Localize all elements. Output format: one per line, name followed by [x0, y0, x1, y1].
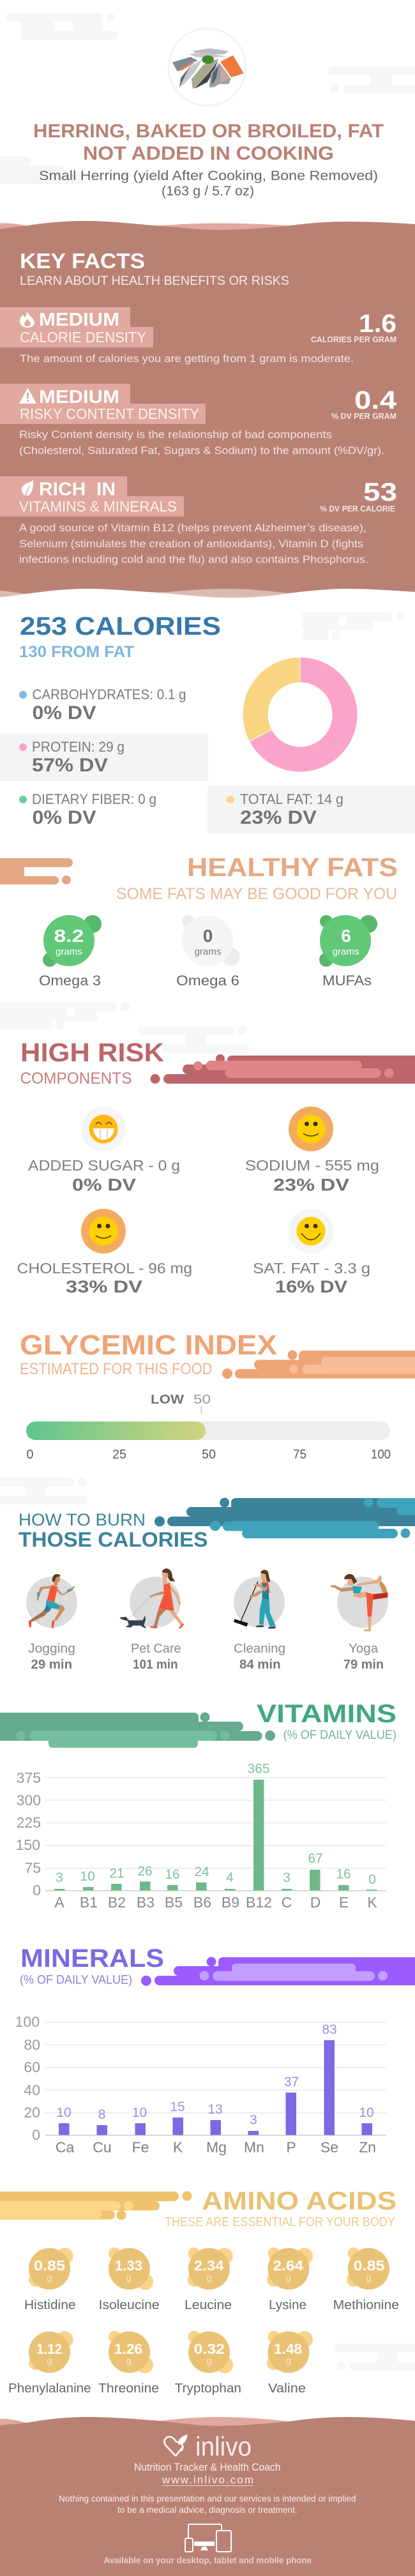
row: total fat	[207, 786, 415, 833]
header section	[0, 13, 415, 199]
activity: jogging: Jogging	[28, 1642, 75, 1656]
bar chart: vitamins: 24	[194, 1865, 209, 1879]
panel: minerals	[15, 1944, 415, 2156]
bar chart: vitamins: 75	[24, 1860, 41, 1876]
fat: omega 6: Omega 6	[176, 973, 239, 989]
row: dietary fiber: DIETARY FIBER: 0 g	[32, 791, 156, 807]
disclaimer	[59, 2494, 356, 2515]
heading: 253 calories: 253 CALORIES	[20, 612, 221, 640]
gauge marker: LOW	[151, 1393, 184, 1407]
decoration: orange bars	[222, 1350, 415, 1379]
fact: calorie density: CALORIES PER GRAM	[311, 335, 396, 344]
fact: risky content density: Risky Content density is the relationship of bad components	[19, 428, 332, 441]
amino: tryptophan: Tryptophan	[175, 2382, 241, 2396]
subheading: healthy fats: SOME FATS MAY BE GOOD FOR YOU	[116, 885, 397, 903]
fact: vitamins and minerals	[0, 476, 397, 566]
bar chart: minerals: 10	[56, 2105, 72, 2120]
amino: histidine: Histidine	[24, 2298, 76, 2312]
gauge axis: 25	[112, 1448, 126, 1462]
amino: histidine	[24, 2248, 76, 2312]
bar chart: vitamins: A	[54, 1894, 64, 1911]
title: HERRING, BAKED OR BROILED, FAT	[33, 121, 384, 142]
fact: vitamins and minerals: RICH IN	[39, 479, 116, 499]
icon: happy face	[296, 1217, 326, 1245]
risk: added sugar	[28, 1107, 180, 1194]
amino: phenylalanine: 1.12	[36, 2341, 62, 2357]
disclaimer: Nothing contained in this presentation and our services is intended or implied	[59, 2494, 356, 2504]
fat: omega 3	[39, 915, 102, 989]
row: total fat: TOTAL FAT: 14 g	[240, 791, 343, 807]
risk: added sugar: 0% DV	[72, 1175, 136, 1194]
bar chart: vitamins: 16	[165, 1867, 180, 1882]
amino: threonine: g	[126, 2356, 132, 2367]
amino: methionine	[333, 2248, 399, 2312]
bar chart: vitamins: B6	[193, 1894, 211, 1911]
bar chart: minerals: 15	[170, 2100, 185, 2114]
amino: tryptophan: 0.32	[194, 2341, 225, 2357]
risk: cholesterol: 33% DV	[66, 1277, 142, 1296]
panel: key facts	[0, 221, 415, 598]
bar chart: vitamins: K	[367, 1894, 377, 1911]
activity: yoga: 79 min	[343, 1658, 384, 1672]
gauge axis: 100	[371, 1448, 391, 1462]
amino: valine: g	[285, 2356, 291, 2367]
fact: risky content density: MEDIUM	[39, 387, 119, 407]
bar chart: minerals	[15, 2013, 386, 2156]
subheading: from fat: 130 FROM FAT	[19, 643, 134, 661]
logo: inlivo: inlivo	[195, 2432, 252, 2462]
bar chart: minerals: P	[286, 2139, 296, 2156]
bar chart: vitamins: B3	[137, 1894, 155, 1911]
fact: calorie density	[0, 307, 396, 365]
bar chart: minerals: 10	[359, 2105, 374, 2120]
gauge axis: 0	[27, 1448, 33, 1462]
fact: risky content density	[0, 384, 397, 457]
heading: key facts: KEY FACTS	[20, 249, 145, 273]
bar chart: minerals: 8	[98, 2107, 105, 2122]
bar chart: vitamins: 3	[283, 1870, 290, 1885]
icon: devices	[185, 2524, 231, 2552]
disclaimer: to be a medical advice, diagnosis or treatment.	[117, 2504, 298, 2515]
activity: yoga: Yoga	[349, 1642, 379, 1656]
amino: histidine: g	[47, 2273, 52, 2284]
fact: vitamins and minerals: infections including cold and the flu) and also contains Phosphorus.	[19, 553, 368, 566]
bar chart: minerals: Mg	[206, 2139, 227, 2156]
bar chart: minerals: Cu	[93, 2139, 112, 2156]
fat: omega 3: grams	[56, 946, 82, 957]
bar chart: minerals: 100	[15, 2013, 40, 2030]
activity: pet care: Pet Care	[131, 1642, 181, 1656]
heading: high risk: HIGH RISK	[20, 1038, 164, 1067]
heading: glycemic index: GLYCEMIC INDEX	[20, 1330, 277, 1361]
title: NOT ADDED IN COOKING	[83, 143, 334, 164]
fact: calorie density: MEDIUM	[39, 310, 119, 330]
bar chart: minerals: Zn	[359, 2139, 376, 2156]
bar chart: vitamins: C	[282, 1894, 292, 1911]
risk: sodium	[245, 1107, 379, 1194]
icon: smiling face	[89, 1217, 117, 1245]
amino: methionine: Methionine	[333, 2298, 399, 2312]
activity: cleaning: 84 min	[239, 1658, 281, 1672]
heading: those calories: THOSE CALORIES	[19, 1528, 208, 1551]
row: protein	[0, 734, 208, 781]
bar chart: vitamins: 375	[17, 1769, 41, 1786]
food image circle	[169, 28, 246, 106]
panel: footer	[0, 2417, 415, 2576]
bar chart: vitamins: 10	[80, 1869, 95, 1884]
bar chart: vitamins: E	[339, 1894, 349, 1911]
bar chart: vitamins: D	[310, 1894, 321, 1911]
amino: isoleucine: g	[126, 2273, 132, 2284]
amino: isoleucine: Isoleucine	[99, 2298, 160, 2312]
fact: vitamins and minerals: 53	[363, 478, 397, 506]
amino: leucine: g	[206, 2273, 212, 2284]
bar chart: vitamins: 16	[336, 1867, 351, 1882]
row: dietary fiber	[19, 791, 156, 828]
fat: omega 6	[176, 915, 240, 989]
risk: saturated fat	[253, 1209, 370, 1296]
icon: warning triangle	[19, 388, 36, 404]
icon: woman in yoga pose	[331, 1574, 388, 1632]
bar chart: vitamins: 150	[16, 1837, 40, 1853]
fat: mufas	[319, 915, 377, 989]
panel: calories	[0, 612, 415, 833]
icon: grinning face	[89, 1115, 117, 1143]
bar chart: minerals: 40	[24, 2082, 40, 2098]
panel: high risk	[0, 1002, 415, 1296]
fact: risky content density: (Cholesterol, Saturated Fat, Sugars & Sodium) to the amount (%DV/gr).	[19, 444, 384, 457]
amino: methionine: g	[366, 2273, 372, 2284]
amino: valine: 1.48	[274, 2341, 302, 2357]
row: carbohydrates: CARBOHYDRATES: 0.1 g	[32, 686, 186, 702]
bar chart: minerals: 83	[322, 2022, 337, 2037]
bar chart: minerals: Mn	[244, 2139, 264, 2156]
subheading: essential: THESE ARE ESSENTIAL FOR YOUR BODY	[165, 2215, 395, 2229]
bar chart: vitamins: 225	[17, 1814, 41, 1831]
panel: vitamins	[0, 1700, 396, 1911]
fat: mufas: MUFAs	[322, 973, 372, 989]
decoration: yellow bars	[0, 2192, 192, 2220]
amino: phenylalanine: g	[47, 2356, 52, 2367]
icon: leaf	[22, 480, 33, 496]
bar chart: vitamins: B12	[246, 1894, 272, 1911]
risk: saturated fat: 16% DV	[275, 1277, 347, 1296]
activity: yoga	[331, 1574, 388, 1672]
bar chart: minerals: Se	[321, 2139, 338, 2156]
risk: sodium: 23% DV	[273, 1175, 349, 1194]
subheading: daily value: (% OF DAILY VALUE)	[283, 1729, 396, 1742]
fact: vitamins and minerals: VITAMINS & MINERALS	[19, 498, 177, 515]
amino: leucine: Leucine	[185, 2298, 232, 2312]
activity: pet care	[120, 1568, 184, 1672]
fact: risky content density: 0.4	[354, 386, 397, 414]
panel: amino acids	[0, 2187, 415, 2396]
decoration: brown bars	[0, 858, 73, 884]
amino: phenylalanine: Phenylalanine	[8, 2382, 91, 2396]
donut chart	[243, 657, 358, 772]
title	[33, 121, 384, 164]
fat: omega 6: grams	[194, 946, 221, 957]
heading: vitamins: VITAMINS	[257, 1700, 396, 1728]
bar chart: vitamins: 0	[368, 1872, 376, 1887]
gauge marker	[151, 1393, 211, 1414]
row: dietary fiber: 0% DV	[32, 807, 96, 828]
amino: isoleucine: 1.33	[115, 2258, 142, 2274]
subheading: daily value: (% OF DAILY VALUE)	[20, 1974, 132, 1987]
bar chart: minerals: 10	[132, 2105, 147, 2120]
bar chart: vitamins: B5	[165, 1894, 183, 1911]
fact: risky content density: RISKY CONTENT DENSITY	[20, 405, 199, 422]
risk: sodium: SODIUM - 555 mg	[245, 1157, 379, 1174]
amino: phenylalanine	[8, 2331, 91, 2396]
fat: omega 6: 0	[203, 926, 213, 946]
heading: amino acids: AMINO ACIDS	[202, 2187, 396, 2215]
icon: jogger	[29, 1574, 75, 1628]
bar chart: minerals: 80	[24, 2036, 40, 2053]
bar chart: minerals: 0	[32, 2126, 40, 2143]
serving subtitle	[39, 169, 378, 199]
fact: calorie density: CALORIE DENSITY	[20, 329, 146, 345]
risk: added sugar: ADDED SUGAR - 0 g	[28, 1157, 180, 1174]
gauge axis: 75	[293, 1448, 306, 1462]
gauge bar	[26, 1421, 390, 1440]
bar chart: minerals: Fe	[132, 2139, 149, 2156]
fact: vitamins and minerals: A good source of Vitamin B12 (helps prevent Alzheimer’s disease),	[19, 522, 366, 534]
amino: tryptophan	[175, 2331, 241, 2396]
activity: jogging: 29 min	[31, 1658, 72, 1672]
bar chart: vitamins: B1	[80, 1894, 98, 1911]
fact: vitamins and minerals: % DV PER CALORIE	[320, 504, 395, 513]
gauge marker: 50	[193, 1393, 211, 1407]
fact: vitamins and minerals: Selenium (stimulates the creation of antioxidants), Vitamin D (fights	[19, 538, 363, 550]
bar chart: vitamins: 4	[226, 1870, 234, 1885]
availability note: Available on your desktop, tablet and mobile phone	[103, 2555, 312, 2565]
heading: minerals: MINERALS	[20, 1944, 164, 1973]
amino: valine: Valine	[268, 2382, 306, 2396]
amino: isoleucine	[99, 2248, 160, 2312]
amino: threonine: Threonine	[98, 2382, 159, 2396]
amino: lysine: g	[285, 2273, 291, 2284]
fact: calorie density: 1.6	[359, 310, 396, 338]
bar chart: vitamins: 0	[33, 1882, 41, 1898]
decoration: purple bars	[141, 1957, 415, 1986]
amino: lysine	[267, 2248, 313, 2312]
subheading: key facts: LEARN ABOUT HEALTH BENEFITS OR RISKS	[20, 273, 289, 288]
bar chart: minerals: 3	[250, 2113, 257, 2128]
gauge axis: 50	[202, 1448, 216, 1462]
amino: leucine: 2.34	[194, 2258, 224, 2274]
website link: www.inlivo.com	[162, 2474, 253, 2486]
amino: lysine: 2.64	[273, 2258, 304, 2274]
row: total fat: 23% DV	[240, 807, 317, 828]
row: carbohydrates	[19, 686, 186, 724]
fat: omega 3: 8.2	[54, 926, 84, 946]
heading: how to burn: HOW TO BURN	[19, 1510, 146, 1529]
fat: mufas: 6	[341, 926, 351, 946]
amino: threonine	[98, 2331, 159, 2396]
bar chart: vitamins: 67	[308, 1851, 323, 1866]
bar chart: minerals: K	[173, 2139, 183, 2156]
activity: jogging	[26, 1574, 77, 1672]
fact: calorie density: The amount of calories you are getting from 1 gram is moderate.	[20, 352, 354, 365]
bar chart: vitamins: 300	[17, 1792, 41, 1808]
bar chart: vitamins: 26	[137, 1864, 153, 1879]
icon: woman walking dog	[120, 1568, 184, 1629]
bar chart: minerals: 60	[24, 2059, 40, 2075]
bar chart: vitamins: 3	[56, 1870, 63, 1885]
fat: mufas: grams	[332, 946, 359, 957]
fact: risky content density: % DV PER GRAM	[331, 411, 396, 421]
heading: healthy fats: HEALTHY FATS	[187, 852, 398, 882]
amino: methionine: 0.85	[354, 2258, 384, 2274]
fat: omega 3: Omega 3	[39, 973, 101, 989]
bar chart: minerals: 37	[284, 2075, 299, 2089]
decoration: teal bars	[155, 1498, 415, 1538]
activity: cleaning	[234, 1570, 285, 1672]
bar chart: minerals: 13	[207, 2102, 223, 2117]
icon: smiling face	[296, 1115, 326, 1143]
amino: threonine: 1.26	[114, 2341, 142, 2357]
serving subtitle: Small Herring (yield After Cooking, Bone Removed)	[39, 169, 378, 183]
activity: pet care: 101 min	[133, 1658, 178, 1672]
panel: how to burn calories	[0, 1478, 415, 1672]
gauge axis	[27, 1448, 391, 1462]
bar chart: vitamins: 365	[247, 1762, 270, 1777]
decoration: red bars	[151, 1054, 415, 1084]
icon: woman sweeping	[234, 1570, 276, 1629]
bar chart: vitamins	[16, 1762, 386, 1911]
amino: leucine	[185, 2248, 233, 2312]
bar chart: vitamins: B9	[222, 1894, 239, 1911]
bar chart: vitamins: B2	[108, 1894, 126, 1911]
row: protein: PROTEIN: 29 g	[32, 739, 124, 755]
bar chart: vitamins: 21	[109, 1867, 124, 1881]
subheading: estimated: ESTIMATED FOR THIS FOOD	[20, 1360, 212, 1378]
logo: inlivo	[165, 2432, 252, 2462]
serving subtitle: (163 g / 5.7 oz)	[162, 184, 254, 199]
risk: cholesterol	[17, 1209, 192, 1296]
amino: valine	[267, 2331, 313, 2396]
subheading: components: COMPONENTS	[20, 1070, 132, 1087]
amino: lysine: Lysine	[269, 2298, 306, 2312]
bar chart: minerals: 20	[24, 2104, 40, 2121]
risk: cholesterol: CHOLESTEROL - 96 mg	[17, 1260, 192, 1277]
activity: cleaning: Cleaning	[234, 1642, 285, 1656]
amino: histidine: 0.85	[34, 2258, 65, 2274]
bar chart: minerals: Ca	[56, 2139, 75, 2156]
row: protein: 57% DV	[32, 755, 108, 776]
panel: healthy fats	[0, 852, 398, 989]
icon: flame	[20, 311, 34, 328]
risk: saturated fat: SAT. FAT - 3.3 g	[253, 1260, 370, 1277]
decoration: green bars	[0, 1713, 275, 1748]
row: carbohydrates: 0% DV	[32, 702, 96, 724]
amino: tryptophan: g	[206, 2356, 212, 2367]
panel: glycemic index	[20, 1330, 415, 1462]
tagline: Nutrition Tracker & Health Coach	[134, 2461, 281, 2473]
